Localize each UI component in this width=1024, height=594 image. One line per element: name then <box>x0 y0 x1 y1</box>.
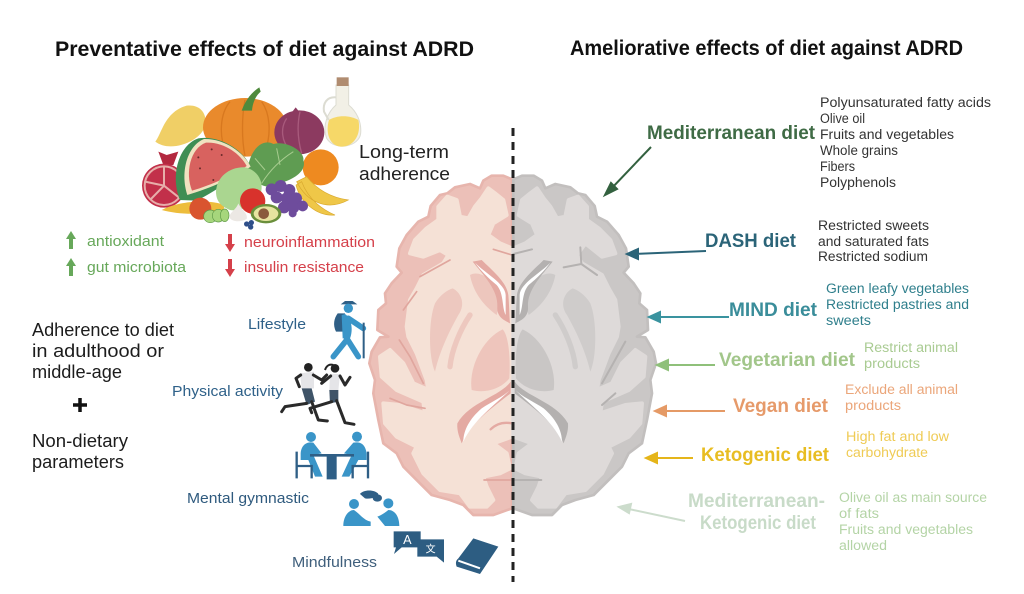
diet: Vegan <box>655 382 958 417</box>
label: long-term adherence <box>359 141 450 184</box>
title: preventative effects: Preventative effects of diet against ADRD <box>55 38 474 61</box>
arrow <box>655 406 725 416</box>
title: ameliorative effects: Ameliorative effects of diet against ADRD <box>570 37 963 60</box>
icon: grapes <box>266 180 308 217</box>
benefits: decreased: neuroinflammation <box>244 235 375 251</box>
brain illustration <box>369 176 656 515</box>
diet: Mediterranean-Ketogenic <box>619 490 987 553</box>
icon: translation bubbles <box>394 531 444 563</box>
details: Fibers <box>820 159 855 174</box>
details: Restricted sodium <box>818 249 928 264</box>
details: carbohydrate <box>846 445 928 460</box>
diet: Vegetarian: Vegetarian diet <box>719 350 856 371</box>
activity: lifestyle: Lifestyle <box>248 317 306 333</box>
diet: Mediterranean: Mediterranean diet <box>647 123 816 144</box>
activity: physical activity <box>172 363 354 424</box>
diet: MIND: MIND diet <box>729 300 818 321</box>
icon: hiker <box>333 301 364 358</box>
icon: bananas <box>296 177 348 215</box>
diet: DASH <box>627 218 929 264</box>
plus sign <box>73 398 87 412</box>
arrow <box>649 312 729 322</box>
icon: up arrow <box>66 231 76 249</box>
benefits: decreased <box>225 234 375 277</box>
details: Restricted pastries and <box>826 297 969 312</box>
details: Whole grains <box>820 143 898 158</box>
text block: adherence to diet <box>32 320 174 472</box>
brain: right hemisphere (grey) <box>513 176 656 515</box>
details <box>846 429 949 460</box>
details: Olive oil <box>820 111 865 126</box>
details <box>818 218 929 264</box>
details <box>845 382 958 413</box>
text block: adherence to diet: middle-age <box>32 362 122 382</box>
details: Green leafy vegetables <box>826 281 969 296</box>
icon: mango <box>155 105 206 146</box>
icon: translation bubbles: A <box>403 533 412 547</box>
activity: mental gymnastic <box>187 432 399 526</box>
lateral ventricles <box>473 260 510 323</box>
details: sweets <box>826 313 871 328</box>
icon: red onion <box>274 107 324 154</box>
diet: Vegan: Vegan diet <box>733 396 829 417</box>
arrow <box>657 360 715 370</box>
details: allowed <box>839 538 887 553</box>
icon: tomato <box>189 198 211 220</box>
text block: adherence to diet: in adulthood or <box>32 341 164 361</box>
diet: Mediterranean-Ketogenic: Ketogenic diet <box>700 513 817 534</box>
label: long-term adherence: adherence <box>359 163 450 184</box>
icon: yellow squash <box>162 201 225 214</box>
details: Fruits and vegetables <box>839 522 973 537</box>
activity: mental gymnastic: Mental gymnastic <box>187 491 309 507</box>
details: Polyunsaturated fatty acids <box>820 95 991 110</box>
icon: runners <box>282 363 354 424</box>
icon: translation bubbles: 文 <box>426 543 436 556</box>
details <box>820 95 991 190</box>
details <box>864 340 958 371</box>
details: High fat and low <box>846 429 949 444</box>
basal ganglia <box>526 274 555 315</box>
lateral ventricles <box>515 260 553 323</box>
diet: Ketogenic: Ketogenic diet <box>701 445 830 466</box>
icon: pomegranate <box>142 152 186 208</box>
icon: olive oil bottle <box>324 77 361 147</box>
activity: lifestyle <box>248 301 364 358</box>
icon: people at table <box>297 432 368 479</box>
icon: book <box>456 538 498 574</box>
icon: cabbage <box>216 167 262 210</box>
icon: apple <box>240 188 265 214</box>
details <box>826 281 969 328</box>
diet: Mediterranean-Ketogenic: Mediterranean- <box>688 491 825 512</box>
icon: leafy greens <box>248 142 304 187</box>
diet: DASH: DASH diet <box>705 231 797 252</box>
activity: mindfulness: Mindfulness <box>292 555 377 571</box>
text block: adherence to diet: Non-dietary <box>32 431 128 451</box>
icon: down arrow <box>225 234 235 252</box>
diet: Ketogenic <box>646 429 949 466</box>
details: Fruits and vegetables <box>820 127 954 142</box>
activity: mindfulness <box>292 531 498 574</box>
icon: group conversation <box>343 490 399 526</box>
benefits: increased: antioxidant <box>87 234 164 250</box>
arrow <box>627 249 706 259</box>
icon: pumpkin <box>203 87 287 157</box>
basal ganglia <box>470 274 500 315</box>
diet: Mediterranean <box>605 95 991 195</box>
arrow <box>646 453 693 463</box>
icon: up arrow <box>66 258 76 276</box>
arrow <box>619 504 685 521</box>
label: long-term adherence: Long-term <box>359 141 449 162</box>
benefits: decreased: insulin resistance <box>244 260 364 276</box>
details <box>839 490 987 553</box>
details: Exclude all animal <box>845 382 958 397</box>
illustration: fruit, vegetables and olive oil <box>142 77 361 230</box>
icon: avocado <box>251 204 281 223</box>
dashed divider line <box>512 128 514 582</box>
details: and saturated fats <box>818 234 929 249</box>
details: Restrict animal <box>864 340 958 355</box>
details: products <box>845 398 901 413</box>
details: of fats <box>839 506 879 521</box>
brain: left hemisphere (pink) <box>369 176 512 515</box>
text block: adherence to diet: parameters <box>32 452 124 472</box>
benefits: increased: gut microbiota <box>87 260 187 276</box>
icon: blueberries <box>244 220 254 230</box>
benefits: increased <box>66 231 187 276</box>
activity: physical activity: Physical activity <box>172 384 284 400</box>
details: Polyphenols <box>820 175 896 190</box>
diet: Vegetarian <box>657 340 958 371</box>
details: Olive oil as main source <box>839 490 987 505</box>
icon: orange <box>303 149 339 185</box>
icon: garlic <box>229 203 247 221</box>
icon: cucumber slices <box>204 209 229 223</box>
posterior callosal arc <box>491 423 512 429</box>
icon: watermelon <box>176 138 251 201</box>
text block: adherence to diet: Adherence to diet <box>32 320 174 340</box>
icon: down arrow <box>225 259 235 277</box>
details: Restricted sweets <box>818 218 929 233</box>
details: products <box>864 356 920 371</box>
arrow <box>605 147 651 195</box>
diet: MIND <box>649 281 969 328</box>
